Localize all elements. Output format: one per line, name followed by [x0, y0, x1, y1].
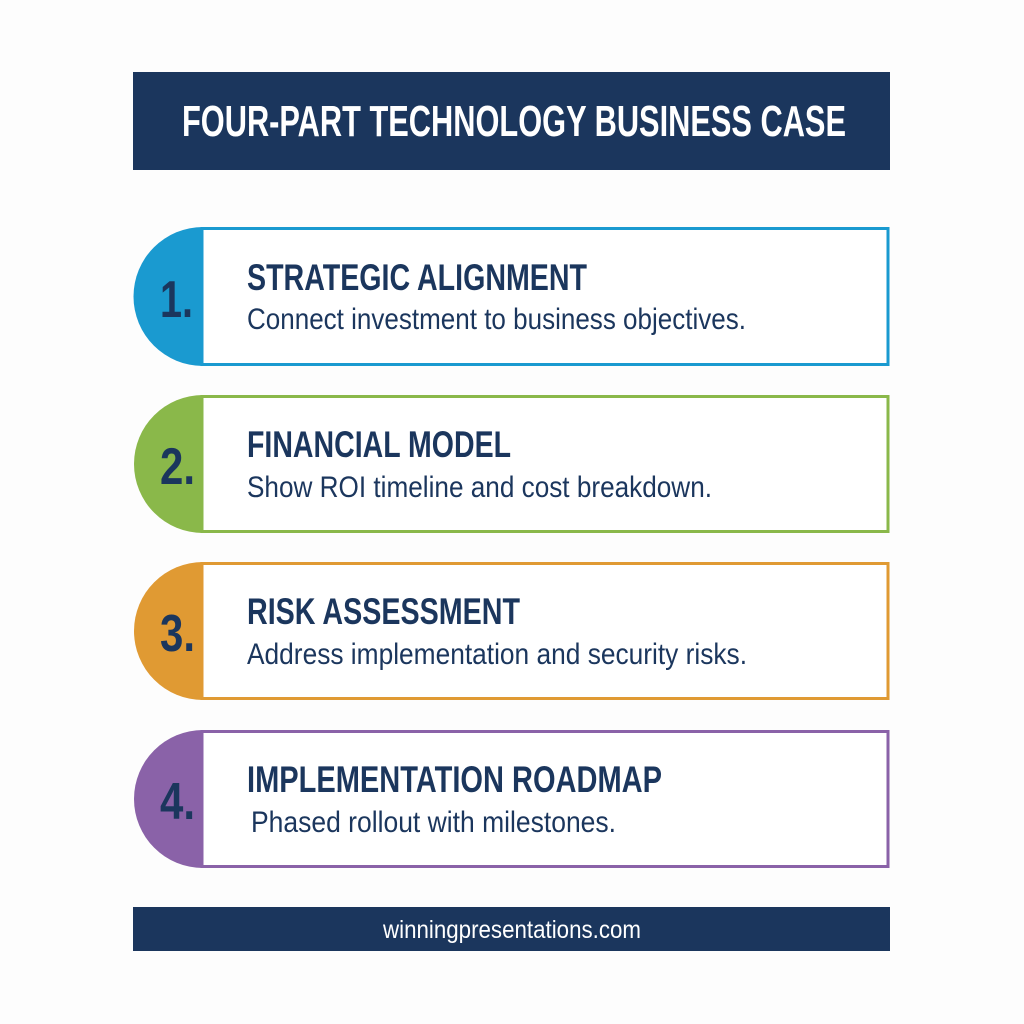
footer: winningpresentations.com: [382, 916, 641, 944]
panel: financial model: Show ROI timeline and cost breakdown.: [247, 471, 712, 504]
panel: strategic alignment: STRATEGIC ALIGNMENT: [247, 257, 587, 298]
footer: [133, 907, 890, 951]
panel: implementation roadmap: [134, 730, 888, 868]
panel: strategic alignment: Connect investment to business objectives.: [247, 303, 746, 336]
panel: risk assessment: [134, 562, 888, 700]
panel: implementation roadmap: Phased rollout with milestones.: [251, 806, 616, 839]
panel: financial model: [134, 395, 888, 533]
panel: risk assessment: Address implementation and security risks.: [247, 638, 747, 671]
title: [133, 72, 890, 170]
panel: strategic alignment: 1.: [160, 271, 193, 329]
panel: risk assessment: RISK ASSESSMENT: [247, 591, 520, 632]
panel: implementation roadmap: 4.: [160, 773, 195, 831]
panel: strategic alignment: [134, 227, 888, 366]
panel: financial model: 2.: [160, 438, 195, 496]
panel: implementation roadmap: IMPLEMENTATION ROADMAP: [247, 759, 662, 800]
panel: risk assessment: 3.: [160, 605, 195, 663]
panel: financial model: FINANCIAL MODEL: [247, 424, 511, 465]
